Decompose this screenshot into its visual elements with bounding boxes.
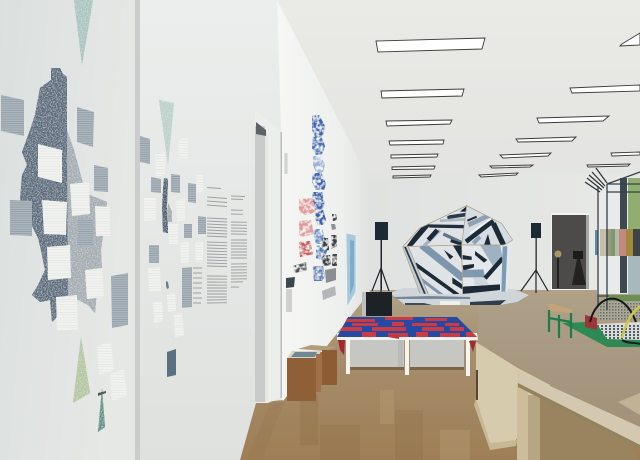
raised wooden platform — [476, 296, 640, 440]
left speaker on stand — [372, 222, 389, 292]
small wooden bench — [547, 304, 573, 338]
face: lower left — [416, 246, 462, 294]
face: right flap — [500, 240, 513, 292]
window — [597, 184, 640, 294]
low black speaker box — [362, 292, 392, 316]
map: dark region — [20, 68, 68, 322]
wooden stools — [287, 345, 337, 401]
wooden ramp support — [515, 370, 640, 460]
elevator doorway — [255, 110, 282, 403]
sculpture platform — [390, 288, 529, 305]
right side cage with window — [585, 168, 640, 320]
right speaker on stand — [521, 223, 548, 293]
plywood ramp panel — [474, 342, 550, 450]
red prints column — [299, 198, 316, 257]
ceiling — [277, 0, 640, 181]
face: upper right — [462, 206, 512, 245]
fin on top — [585, 168, 607, 192]
striped polyhedron sculpture — [402, 203, 515, 297]
tree shape: top — [74, 0, 93, 65]
woven red and blue cover — [335, 315, 480, 355]
map: light region — [67, 130, 107, 313]
side wall artworks — [284, 115, 356, 312]
face: side strips — [403, 246, 428, 294]
back stool — [298, 345, 337, 351]
left wall cards — [1, 95, 128, 401]
face: lower right — [462, 245, 502, 294]
centre wall — [140, 0, 281, 460]
tree shape: pale green — [73, 337, 90, 403]
yellow arch — [622, 306, 640, 338]
cage frame — [598, 172, 640, 310]
small object on wall — [286, 277, 295, 288]
green carpet with checker mat — [562, 299, 640, 347]
table panels — [350, 340, 404, 367]
small label — [98, 391, 106, 396]
hanging banner — [595, 229, 640, 256]
back wall — [365, 175, 640, 295]
side wall — [277, 0, 370, 401]
dark map strip — [162, 178, 168, 233]
green stage edge — [609, 295, 640, 301]
far doorway — [551, 213, 589, 290]
cards — [140, 136, 206, 377]
sculpture edges — [403, 206, 513, 294]
wall corner strip — [135, 0, 140, 460]
map installation — [1, 0, 128, 432]
tree shape: pale — [159, 100, 174, 165]
wall text columns — [193, 188, 247, 303]
black arch — [590, 299, 636, 322]
face: upper left — [407, 206, 466, 246]
dark prints — [293, 214, 337, 300]
table legs — [346, 340, 350, 374]
cage mesh — [598, 302, 640, 320]
ceiling light panels — [376, 33, 640, 178]
diagonal wooden beam — [515, 370, 640, 445]
blue painting — [346, 233, 356, 307]
left wall — [0, 0, 137, 460]
centre wall installation — [140, 100, 247, 377]
front stool with magazine — [287, 351, 321, 358]
blue prints column — [312, 115, 327, 281]
small wall label — [284, 153, 288, 174]
wooden floor — [240, 290, 640, 460]
floor planks — [246, 390, 470, 460]
exhibition table with red and blue cover — [335, 315, 480, 376]
table top — [337, 333, 478, 340]
tree shape: small teal — [98, 388, 105, 432]
